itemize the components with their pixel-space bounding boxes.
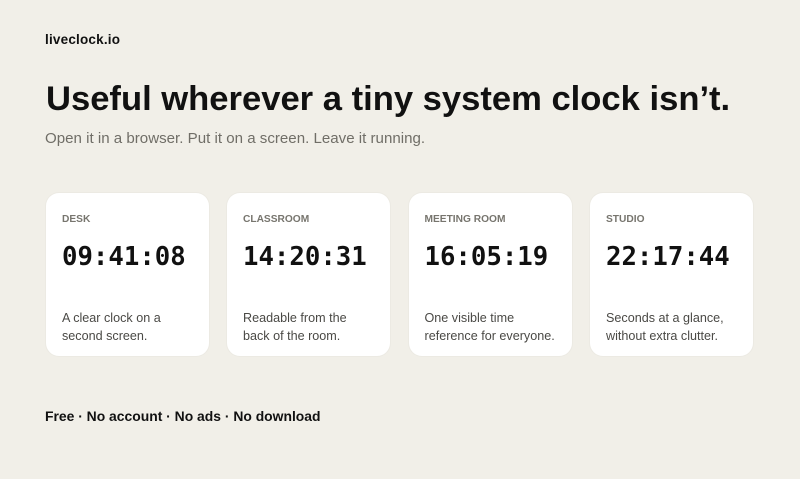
clock: desk: 09:41:08 <box>62 242 186 272</box>
description: meeting room: reference for everyone. <box>424 329 555 343</box>
label: meeting room: MEETING ROOM <box>424 214 505 224</box>
description: desk: second screen. <box>62 329 147 343</box>
title: Useful wherever a tiny system clock isn’t. <box>46 80 730 118</box>
brand name: liveclock.io <box>45 32 120 47</box>
description: studio: Seconds at a glance, <box>606 311 724 325</box>
description: classroom: Readable from the <box>243 311 347 325</box>
label: classroom: CLASSROOM <box>243 214 309 224</box>
clock: classroom: 14:20:31 <box>243 242 367 272</box>
description: studio <box>606 311 724 343</box>
description: meeting room: One visible time <box>424 311 514 325</box>
description: studio: without extra clutter. <box>606 329 718 343</box>
footer features: Free · No account · No ads · No download <box>45 408 321 424</box>
panel: studio <box>590 193 753 356</box>
clock: studio: 22:17:44 <box>606 242 730 272</box>
panel: classroom <box>227 193 390 356</box>
description: classroom: back of the room. <box>243 329 340 343</box>
description: desk <box>62 311 161 343</box>
description: classroom <box>243 311 347 343</box>
label: desk: DESK <box>62 214 90 224</box>
description: meeting room <box>424 311 555 343</box>
label: studio: STUDIO <box>606 214 644 224</box>
subtitle: Open it in a browser. Put it on a screen. Leave it running. <box>45 130 425 147</box>
panel: meeting room <box>408 193 572 356</box>
clock: meeting room: 16:05:19 <box>424 242 548 272</box>
description: desk: A clear clock on a <box>62 311 161 325</box>
panel: desk <box>46 193 209 356</box>
